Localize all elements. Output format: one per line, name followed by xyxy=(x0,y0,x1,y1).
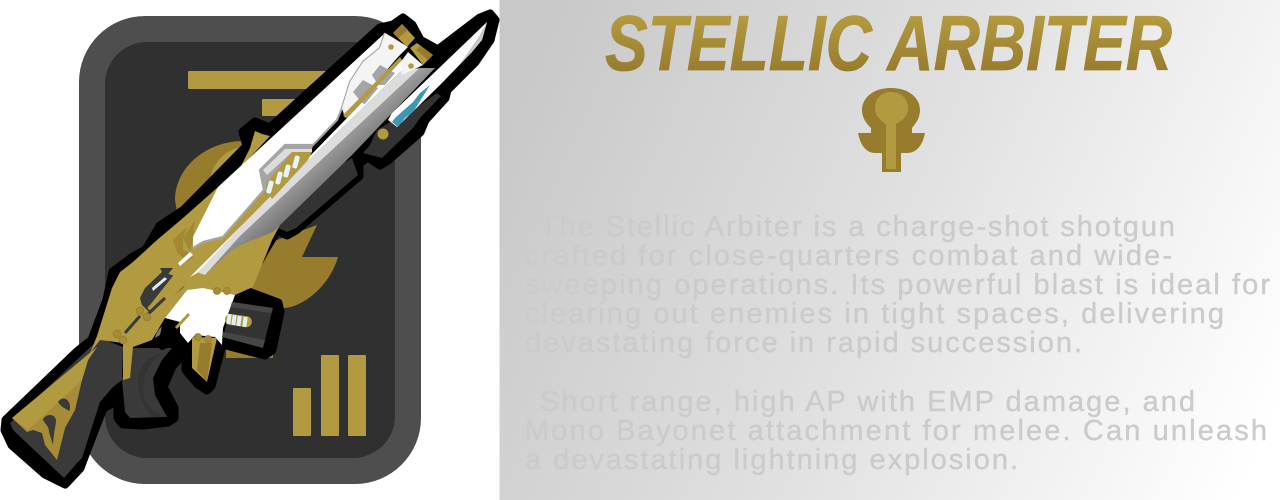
trigger guard gold xyxy=(192,337,217,382)
stock cutouts xyxy=(43,399,70,445)
white upper shroud xyxy=(193,33,385,248)
right panel background xyxy=(500,0,1280,500)
stat bars xyxy=(293,355,366,436)
muzzle pins xyxy=(388,44,414,69)
paragraph 2: a devastating lightning explosion. xyxy=(525,444,1018,476)
paragraph 1: The Stellic Arbiter is a charge-shot shotgun xyxy=(540,211,1175,243)
muzzle white upper xyxy=(342,33,408,118)
paragraph 1: crafted for close-quarters combat and wide- xyxy=(525,240,1172,272)
white lower guard xyxy=(165,288,235,345)
blade cyan detail xyxy=(392,85,430,127)
main gold receiver xyxy=(90,150,300,380)
gold rail xyxy=(343,57,402,118)
vent panel xyxy=(261,146,313,199)
rail hex plates xyxy=(353,65,395,104)
receiver shade xyxy=(173,220,195,262)
groove line xyxy=(125,298,165,333)
weapon illustration: shotgun xyxy=(5,14,495,484)
barrel light band xyxy=(197,68,420,275)
charging slot xyxy=(140,268,189,313)
description text xyxy=(525,211,1270,476)
paragraph 1 xyxy=(525,211,1270,359)
bayonet mount xyxy=(363,93,441,158)
paragraph 1: clearing out enemies in tight spaces, delivering xyxy=(525,298,1224,330)
icon: faction emblem xyxy=(858,88,925,172)
thin white stripe xyxy=(178,252,193,266)
paragraph 2 xyxy=(525,386,1267,476)
paragraph 2: Mono Bayonet attachment for melee. Can unleash xyxy=(525,415,1267,447)
weapon card xyxy=(79,16,421,484)
trigger blob xyxy=(153,323,180,348)
stock gold panel xyxy=(12,347,97,460)
gold pins xyxy=(113,288,230,344)
trigger xyxy=(176,314,189,328)
mono bayonet blade xyxy=(388,22,487,127)
shroud gray trim xyxy=(193,33,385,248)
magazine xyxy=(222,302,273,348)
grip xyxy=(122,348,172,418)
barrel white band xyxy=(190,60,417,277)
paragraph 2: Short range, high AP with EMP damage, and xyxy=(540,386,1195,418)
gun silhouette outline xyxy=(5,14,495,484)
paragraph 1: devastating force in rapid succession. xyxy=(525,327,1082,359)
barrel gray underside xyxy=(205,68,435,275)
stock dark base xyxy=(10,338,123,478)
dark block under barrel xyxy=(278,158,358,232)
card emblem xyxy=(175,71,338,358)
paragraph 1: sweeping operations. Its powerful blast is ideal for xyxy=(525,269,1270,301)
upper lug xyxy=(240,131,270,168)
muzzle gold tips xyxy=(393,24,433,75)
